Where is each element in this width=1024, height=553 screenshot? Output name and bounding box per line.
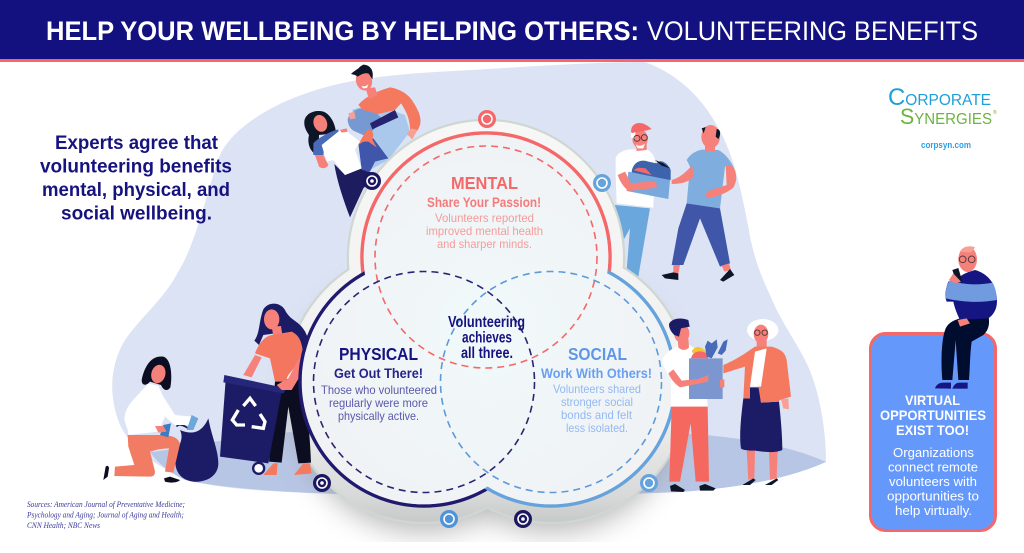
logo (888, 84, 997, 151)
center text: all three. (461, 345, 513, 362)
intro text: volunteering benefits (40, 156, 232, 178)
sources: Psychology and Aging; Journal of Aging and Health; (26, 510, 184, 520)
intro text: social wellbeing. (61, 202, 212, 224)
center text: achieves (462, 330, 512, 346)
social text: less isolated. (566, 421, 628, 435)
outer venn plate (286, 120, 689, 523)
illustration: woman kneeling with trash bag (103, 356, 218, 483)
physical text (321, 344, 437, 423)
intro text: mental, physical, and (42, 179, 230, 201)
physical text: PHYSICAL (339, 344, 418, 364)
social text: stronger social (561, 395, 633, 409)
mental text (426, 173, 543, 251)
header banner: HELP YOUR WELLBEING BY HELPING OTHERS: (46, 16, 639, 46)
physical text: Get Out There! (334, 366, 423, 381)
logo: CORPORATE (888, 84, 991, 111)
panel: virtual opportunities: OPPORTUNITIES (880, 407, 986, 423)
logo: SYNERGIES (900, 104, 992, 129)
physical text: Those who volunteered (321, 383, 437, 397)
social text: Work With Others! (541, 366, 652, 381)
social text (541, 344, 652, 435)
illustration: couple carrying donations (304, 65, 421, 217)
physical text: physically active. (338, 409, 419, 423)
panel: virtual opportunities: VIRTUAL (905, 392, 960, 408)
logo: corpsyn.com (921, 140, 971, 151)
header banner (0, 0, 1024, 62)
outer plate fill (287, 121, 688, 522)
venn dashed circles (314, 146, 662, 492)
illustration: woman with recycling bin (220, 304, 312, 475)
social text: SOCIAL (568, 344, 627, 364)
intro text (40, 132, 232, 224)
sources: Sources: American Journal of Preventative Medicine; (27, 499, 185, 509)
ground shadows (150, 432, 826, 494)
icon: recycling symbol (232, 398, 265, 428)
illustration: seated man with phone (935, 246, 997, 389)
mental text: Share Your Passion! (427, 195, 541, 210)
social text: Volunteers shared (553, 382, 641, 396)
panel: virtual opportunities: EXIST TOO! (896, 422, 969, 438)
intro text: Experts agree that (55, 132, 218, 154)
mental text: Volunteers reported (435, 211, 534, 225)
sources: CNN Health; NBC News (27, 520, 101, 530)
illustration: volunteer and elderly woman with grocery bag (662, 319, 791, 492)
panel: virtual opportunities: opportunities to (887, 488, 979, 504)
panel: virtual opportunities: connect remote (888, 460, 978, 474)
panel: virtual opportunities (870, 334, 996, 530)
center text (448, 314, 525, 362)
sources (26, 499, 185, 530)
physical text: regularly were more (329, 396, 428, 410)
illustration: men with donation box (615, 123, 736, 282)
header banner: VOLUNTEERING BENEFITS (647, 16, 978, 46)
target icons (313, 110, 658, 528)
panel: virtual opportunities: volunteers with (889, 474, 977, 489)
mental text: MENTAL (451, 173, 518, 193)
logo: ® (993, 109, 997, 116)
mental text: improved mental health (426, 224, 543, 238)
center text: Volunteering (448, 314, 525, 331)
panel: virtual opportunities: help virtually. (895, 503, 972, 518)
background blob (112, 62, 826, 494)
mental text: and sharper minds. (437, 237, 532, 251)
venn inner discs (302, 135, 673, 504)
diagram shadow (285, 414, 692, 542)
panel: virtual opportunities: Organizations (893, 445, 974, 460)
venn solid rings (300, 133, 675, 506)
social text: bonds and felt (561, 408, 633, 422)
